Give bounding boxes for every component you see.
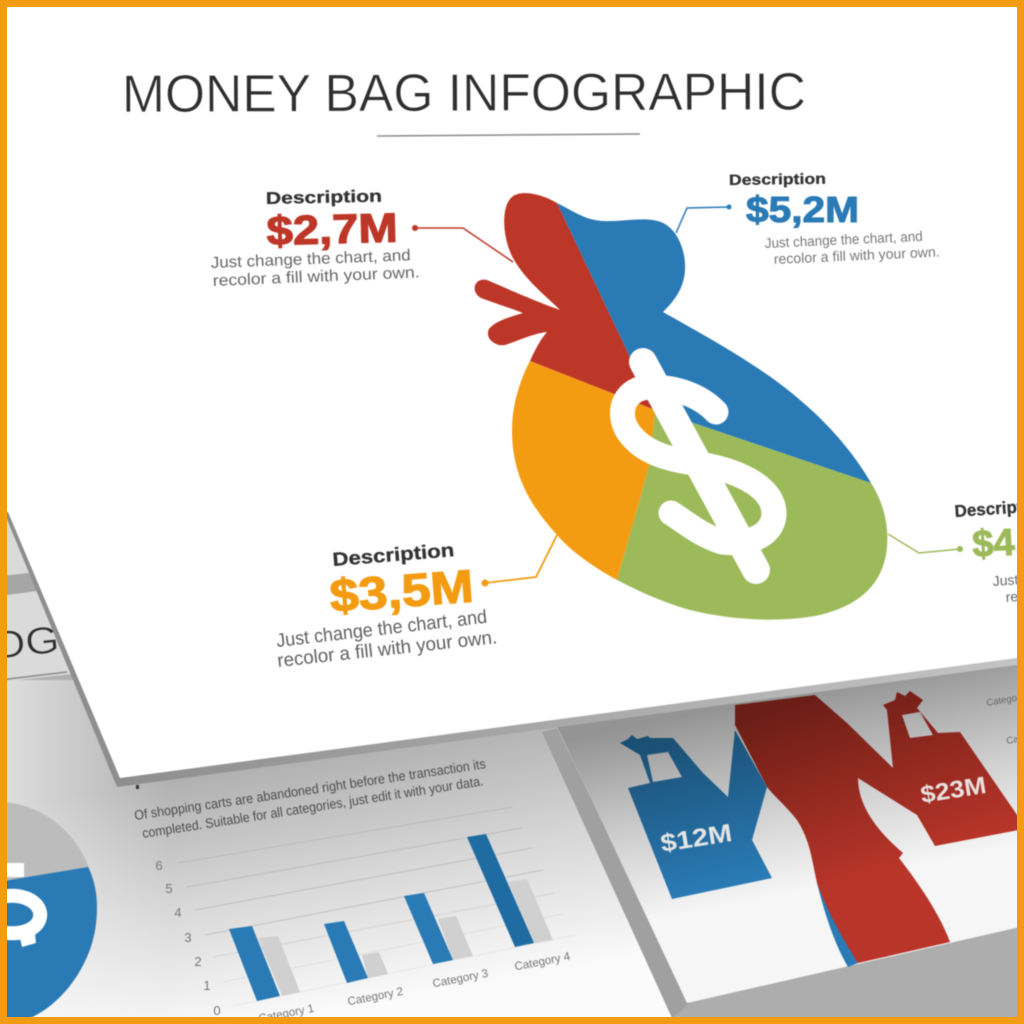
panel: blue circle with dollar xyxy=(0,802,97,1018)
title: MONEY BAG INFOGRAPHIC xyxy=(122,63,806,124)
text block: chart description: Of shopping carts are abandoned right before the transaction its xyxy=(133,756,487,823)
bar chart: Category 4 xyxy=(514,951,572,973)
title underline xyxy=(377,134,640,136)
bar chart: Category 2 xyxy=(347,986,404,1008)
icon: dollar sign xyxy=(622,362,774,570)
body text: Just change the chart, and xyxy=(211,247,411,272)
bar chart: 3 xyxy=(184,930,192,945)
body text: Just change the chart, and xyxy=(764,228,923,251)
background: lower slides area xyxy=(0,500,1024,1024)
panel: main slide xyxy=(0,0,1024,789)
bar chart: 0 xyxy=(213,1003,221,1018)
label: description: Description xyxy=(332,540,455,571)
value: $5,2M xyxy=(746,189,859,230)
body text: recolor a fill with your own. xyxy=(212,264,420,290)
bar chart: 2 xyxy=(194,954,202,969)
blue figure with bag: $12M xyxy=(659,819,734,858)
body text xyxy=(992,568,1024,605)
value: $3,5M xyxy=(328,560,475,622)
bar chart: 6 xyxy=(155,858,163,873)
panel: left background slide xyxy=(0,500,90,682)
body text: recolor a fill with your own. xyxy=(276,627,498,672)
text block: chart description: completed. Suitable for all categories, just edit it with your data. xyxy=(141,773,484,841)
body text xyxy=(275,607,498,672)
body text: recolor a fill with your own. xyxy=(773,243,940,267)
gray strip xyxy=(0,573,37,596)
callout: blue value xyxy=(676,171,940,267)
category labels xyxy=(986,691,1024,747)
callout: red value xyxy=(211,187,513,290)
leader line: red xyxy=(412,225,513,262)
segment: green xyxy=(617,410,887,620)
body text xyxy=(211,247,420,290)
label: description: Description xyxy=(266,187,382,208)
label: description: Description xyxy=(729,171,826,189)
panel: shopping silhouette slide xyxy=(542,660,1024,1024)
bar chart: 1 xyxy=(203,978,211,993)
bar chart: 4 xyxy=(174,905,182,920)
blue figure with bag xyxy=(620,730,858,967)
red figure with bag xyxy=(735,691,1024,963)
body text xyxy=(764,228,940,267)
bar chart xyxy=(155,807,575,1024)
callout: orange value xyxy=(275,535,557,672)
leader line: blue xyxy=(676,204,732,233)
body text: Just change the chart, and xyxy=(275,607,488,652)
panel: bar chart slide xyxy=(133,756,575,1024)
segment: blue xyxy=(557,203,871,483)
leader line: green xyxy=(888,534,963,553)
bar chart: 5 xyxy=(165,881,173,896)
money bag chart xyxy=(475,193,887,620)
segment: orange xyxy=(512,361,655,580)
bar chart: Category 3 xyxy=(432,968,489,990)
callout: green value xyxy=(888,496,1024,605)
red figure with bag: $23M xyxy=(919,772,988,809)
value: $2,7M xyxy=(266,205,398,254)
leader line: orange xyxy=(482,535,557,586)
segment: red xyxy=(475,193,655,410)
category labels: Cat xyxy=(1006,733,1022,747)
